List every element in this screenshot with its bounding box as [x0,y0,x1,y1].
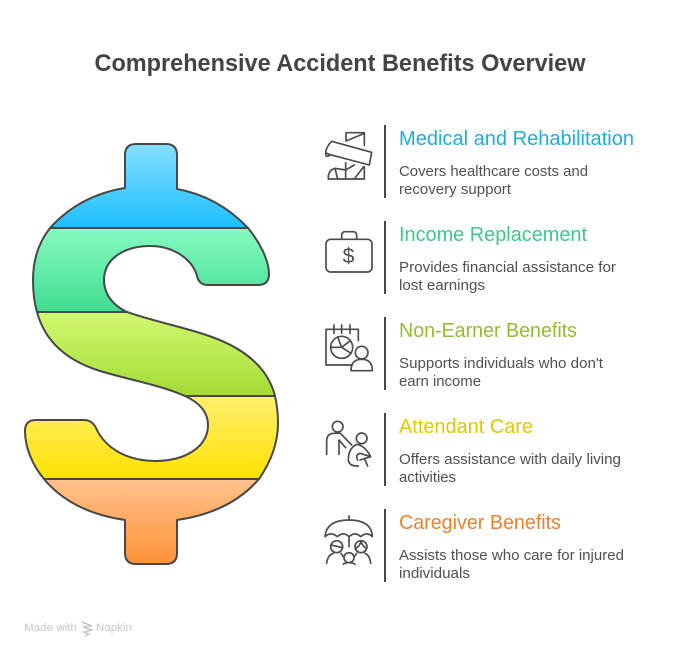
heading: Attendant Care [399,416,533,438]
title: Comprehensive Accident Benefits Overview [94,50,586,77]
divider [384,221,386,294]
description: lost earnings [399,278,485,294]
divider [384,509,386,582]
item: medical and rehabilitation [326,125,634,198]
heading: Non-Earner Benefits [399,320,577,342]
item: income replacement [326,221,616,294]
icon: leg cast [326,133,372,179]
heading: Income Replacement [399,224,587,246]
heading: Caregiver Benefits [399,512,561,534]
description: individuals [399,566,470,582]
icon: briefcase with dollar: $ [343,245,355,268]
icon: briefcase with dollar [326,232,372,272]
description: activities [399,470,456,486]
heading: Medical and Rehabilitation [399,128,634,150]
item: non-earner benefits [326,317,603,390]
divider [384,413,386,486]
description: Supports individuals who don't [399,356,603,372]
dollar sign chart [25,144,278,564]
icon: napkin logo [82,622,92,636]
description: Offers assistance with daily living [399,452,621,468]
icon: carer and patient [327,421,371,466]
description: Provides financial assistance for [399,260,616,276]
band: attendant [25,396,278,479]
band: income [33,228,269,312]
description: Covers healthcare costs and [399,164,588,180]
band: caregiver [44,479,259,564]
band: medical [50,144,248,228]
description: recovery support [399,182,511,198]
icon: family under umbrella [325,516,372,564]
description: Assists those who care for injured [399,548,624,564]
divider [384,317,386,390]
item: caregiver benefits [325,509,624,582]
item: attendant care [327,413,621,486]
footer: made with napkin [24,622,132,636]
icon: calendar and person [326,325,372,371]
description: earn income [399,374,481,390]
band: non-earner [37,312,275,396]
footer: made with napkin: Napkin [96,622,132,634]
divider [384,125,386,198]
footer: made with napkin: Made with [24,622,77,634]
